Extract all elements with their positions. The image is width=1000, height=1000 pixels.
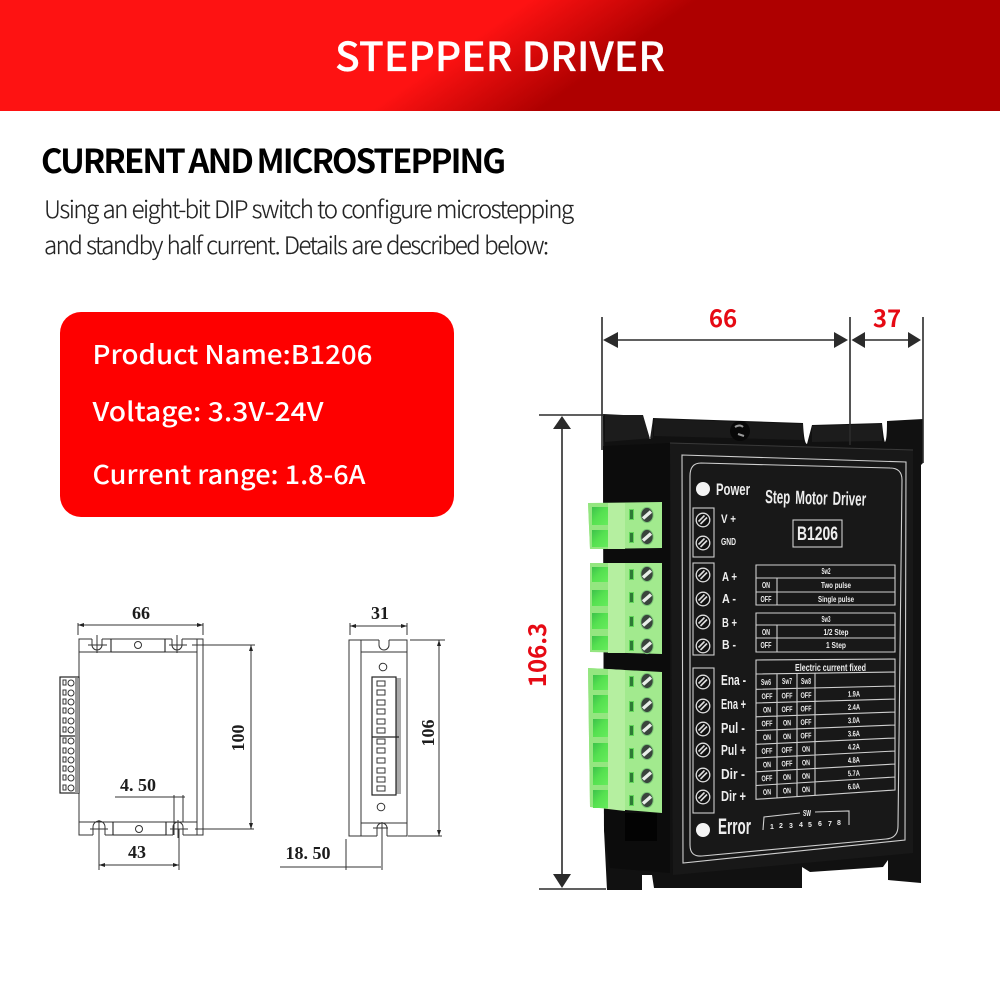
product photo: stepper driver <box>588 414 923 890</box>
control terminals <box>693 668 746 813</box>
table: Sw2: ON <box>762 581 770 590</box>
table: electric current: OFF <box>781 759 793 769</box>
control terminals: Dir - <box>721 766 745 783</box>
table: electric current: ON <box>763 787 771 797</box>
table: electric current: ON <box>802 745 810 754</box>
DIP switch legend: 2 <box>779 823 783 830</box>
dimension 106 <box>408 640 445 836</box>
dimension: height 106.3: 106.3 <box>518 623 553 687</box>
table: electric current: Sw8 <box>801 677 811 686</box>
table: electric current: OFF <box>761 746 773 756</box>
table: Sw2: Sw2 <box>822 567 831 576</box>
table: electric current: 2.4A <box>848 703 860 712</box>
description text: Using an eight-bit DIP switch to configure microstepping <box>44 190 574 225</box>
dimension 100 <box>192 645 255 829</box>
table: electric current: 4.8A <box>848 755 860 765</box>
table: electric current: 4.2A <box>848 742 860 752</box>
dimension 4.50 <box>115 775 185 835</box>
dimension 18.50: 18. 50 <box>286 843 330 863</box>
motor terminals: A - <box>722 591 736 606</box>
motor terminals: B + <box>722 615 737 630</box>
power terminals: V + <box>721 512 736 526</box>
drawing: side view with dimensions <box>280 603 445 870</box>
table: electric current: OFF <box>800 704 812 713</box>
spec: product name: Product Name:B1206 <box>92 335 372 372</box>
table: electric current: 3.6A <box>848 729 860 739</box>
DIP switch legend <box>763 809 849 831</box>
dimension: depth 37 <box>852 299 923 463</box>
table: Sw3 <box>756 613 895 652</box>
table: electric current: ON <box>783 773 791 782</box>
table: electric current: Sw7 <box>782 677 792 686</box>
table: electric current: ON <box>783 786 791 796</box>
table: electric current <box>756 659 895 799</box>
spec: voltage: Voltage: 3.3V-24V <box>91 392 324 429</box>
table: electric current: OFF <box>761 774 773 783</box>
table: Sw2 <box>756 565 895 605</box>
dimension 18.50 <box>280 839 381 870</box>
motor terminals: B - <box>722 637 736 652</box>
table: electric current: OFF <box>761 692 773 701</box>
dimension: width 66: 66 <box>709 299 737 334</box>
table: Sw3: ON <box>762 628 770 637</box>
table: electric current: 5.7A <box>848 769 860 778</box>
power indicator <box>696 480 750 499</box>
table: electric current: 1.9A <box>848 689 860 699</box>
dimension 66: 66 <box>132 603 150 623</box>
table: electric current: ON <box>783 732 791 741</box>
table: electric current: ON <box>802 758 810 767</box>
control terminals: Ena + <box>721 696 746 713</box>
heading: CURRENT AND MICROSTEPPING <box>41 135 506 183</box>
dimension 43 <box>99 829 179 870</box>
control terminals: Pul - <box>721 720 745 737</box>
dimension 43: 43 <box>128 842 146 862</box>
driver housing <box>603 414 923 890</box>
model title: Step Motor Driver <box>765 487 867 511</box>
green connector: 2 pin <box>588 502 662 549</box>
dimension: height 106.3 <box>518 415 606 889</box>
green connector: 4 pin <box>590 563 662 654</box>
DIP switch legend: 4 <box>799 822 803 829</box>
green connector: 6 pin <box>588 668 662 813</box>
dimension 4.50: 4. 50 <box>120 775 156 795</box>
table: electric current: OFF <box>781 705 793 714</box>
table: Sw2: OFF <box>760 595 772 604</box>
power terminals <box>693 508 736 557</box>
power indicator: Power <box>716 480 750 499</box>
drawing: top view with dimensions <box>60 603 255 870</box>
motor terminals: A + <box>722 569 737 584</box>
DIP switch legend: SW <box>803 809 811 818</box>
table: Sw2: Two pulse <box>821 581 851 590</box>
table: electric current: 6.0A <box>848 782 860 791</box>
panel: product specs <box>60 312 454 517</box>
table: electric current: OFF <box>781 745 793 755</box>
table: Sw3: Sw3 <box>822 615 831 624</box>
dimension 100: 100 <box>228 724 248 752</box>
description text: and standby half current. Details are described below: <box>44 226 549 261</box>
DIP switch legend: 5 <box>808 822 812 829</box>
table: electric current: ON <box>802 785 810 794</box>
table: electric current: OFF <box>800 731 812 741</box>
table: electric current: OFF <box>800 718 812 727</box>
title: STEPPER DRIVER <box>335 25 665 83</box>
dimension: width 66 <box>602 299 850 450</box>
dimension 66 <box>78 603 203 635</box>
DIP switch legend: 7 <box>828 821 832 828</box>
table: electric current: ON <box>783 718 791 728</box>
table: electric current: OFF <box>761 719 773 728</box>
table: Sw2: Single pulse <box>818 595 854 604</box>
table: Sw3: OFF <box>760 641 772 650</box>
DIP switch legend: 3 <box>789 823 793 830</box>
DIP switch legend: 6 <box>818 821 822 828</box>
table: electric current: Sw6 <box>761 678 771 687</box>
motor terminals <box>693 563 737 655</box>
power terminals: GND <box>721 537 736 548</box>
table: electric current: Electric current fixed <box>795 663 866 674</box>
model badge: B1206 <box>797 524 838 545</box>
control terminals: Pul + <box>721 742 746 759</box>
table: electric current: ON <box>763 760 771 770</box>
control terminals: Dir + <box>721 788 746 805</box>
table: Sw3: 1 Step <box>826 641 846 650</box>
spec: current range: Current range: 1.8-6A <box>92 455 366 492</box>
faceplate border lines <box>682 455 906 863</box>
table: electric current: OFF <box>781 691 793 701</box>
dimension 31: 31 <box>371 603 389 623</box>
table: electric current: ON <box>763 705 771 715</box>
connector strip <box>60 677 79 793</box>
table: electric current: ON <box>763 733 771 742</box>
DIP switch legend: 8 <box>837 820 841 827</box>
dimension 31 <box>350 603 407 635</box>
table: electric current: 3.0A <box>848 716 860 725</box>
connector end <box>372 677 401 795</box>
table: electric current: OFF <box>800 691 812 700</box>
header banner <box>0 0 1000 111</box>
model badge <box>793 520 842 547</box>
error indicator <box>696 814 751 839</box>
DIP switch legend: 1 <box>770 824 774 831</box>
error indicator: Error <box>718 814 751 839</box>
table: Sw3: 1/2 Step <box>824 628 849 637</box>
control terminals: Ena - <box>721 672 746 689</box>
dimension: depth 37: 37 <box>873 299 901 334</box>
table: electric current: ON <box>802 771 810 781</box>
description text <box>44 190 574 261</box>
dimension 106: 106 <box>418 720 438 746</box>
